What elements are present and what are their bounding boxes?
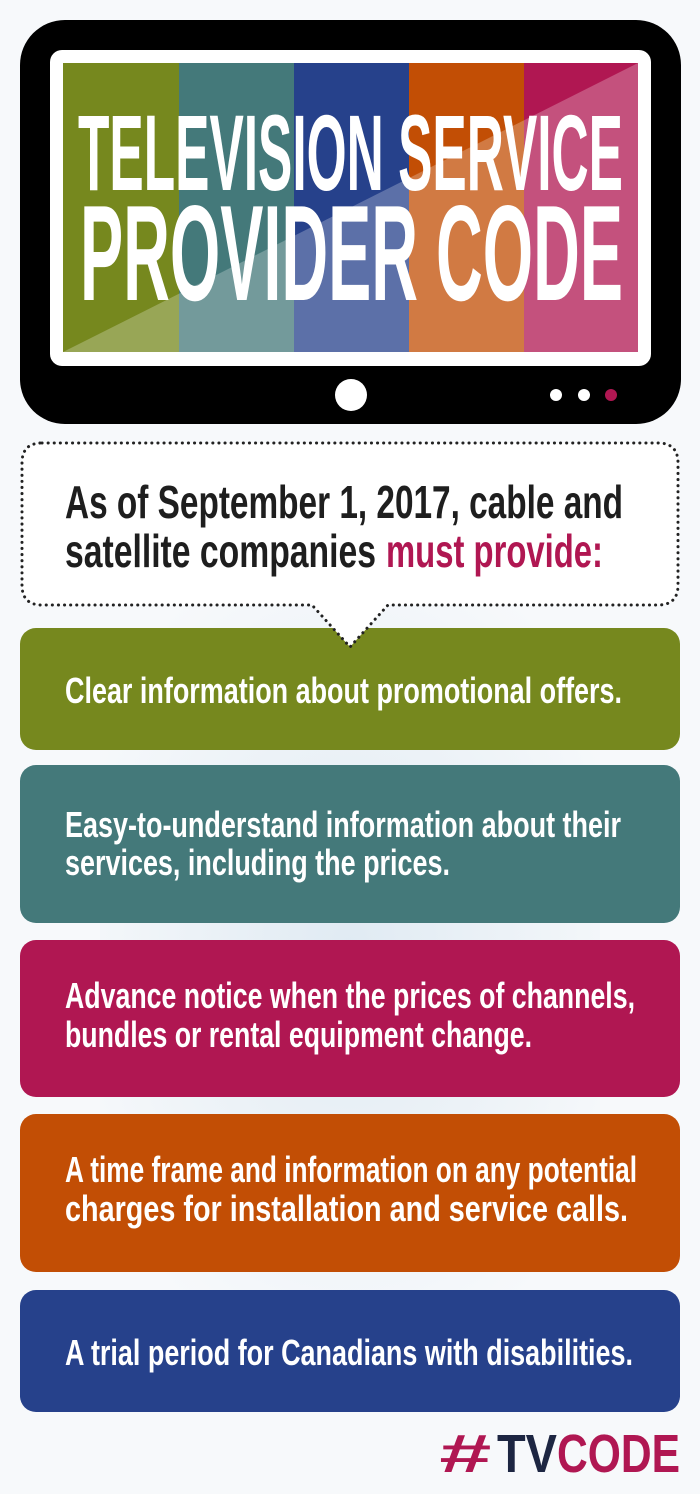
title	[78, 92, 623, 329]
speech bubble: satellite companies	[65, 525, 376, 577]
speech bubble: must provide:	[386, 525, 603, 577]
color stripes	[63, 63, 638, 352]
magenta box	[20, 940, 680, 1097]
hashtag	[438, 1424, 680, 1484]
blue box	[20, 1290, 680, 1412]
icon: power button	[335, 379, 367, 411]
speech bubble	[22, 443, 678, 647]
hashtag: TV	[497, 1424, 557, 1484]
teal box	[20, 765, 680, 923]
hashtag: #	[438, 1424, 490, 1484]
icon: indicator dots	[550, 389, 617, 401]
magenta box: bundles or rental equipment change.	[65, 1014, 532, 1055]
teal box: services, including the prices.	[65, 842, 450, 883]
tv	[20, 20, 681, 424]
orange box	[20, 1114, 680, 1272]
green box	[20, 628, 680, 750]
